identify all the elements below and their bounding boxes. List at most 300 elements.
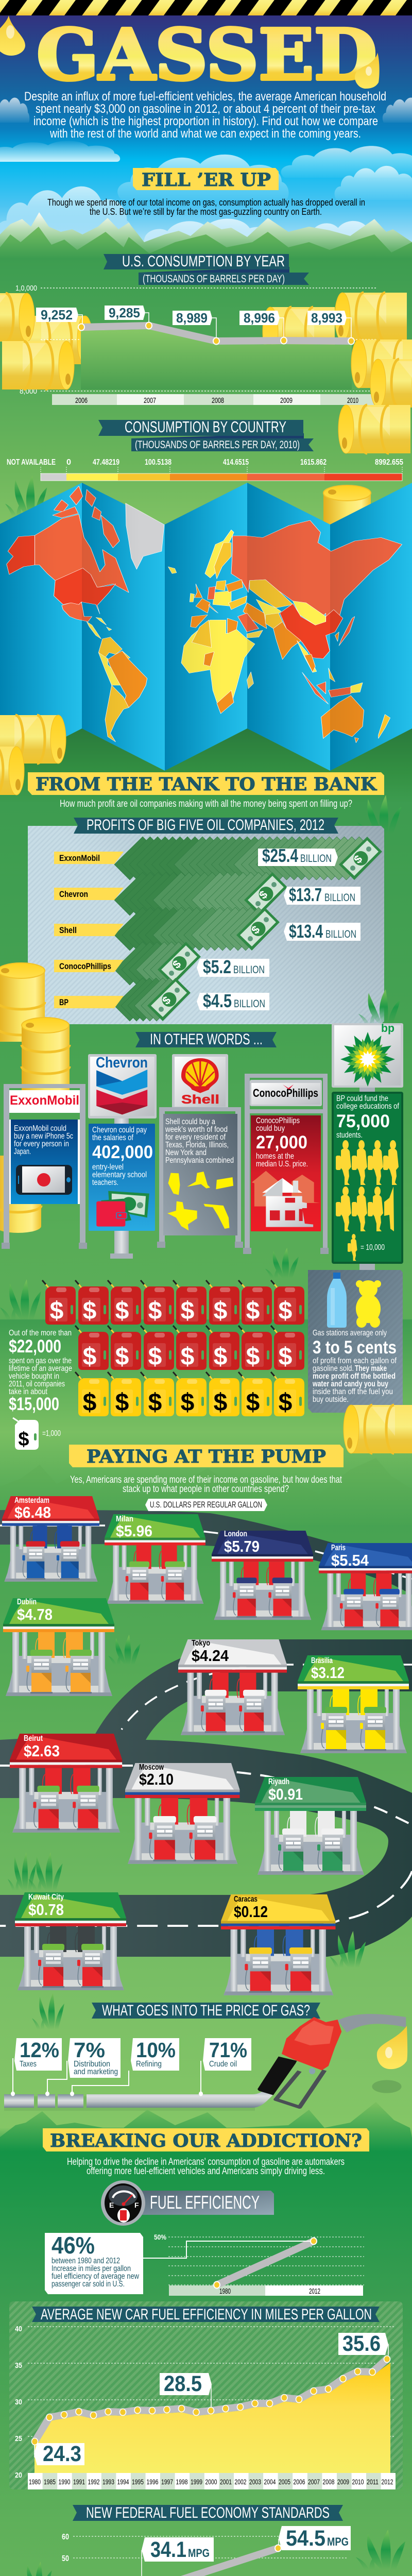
sign: Shell: Pennsylvania combined: [165, 1156, 234, 1165]
jerry cans: $22,000 pictogram: $: [83, 1343, 97, 1370]
sign: Shell: Texas, Florida, Illinois,: [165, 1141, 229, 1149]
company labels: Shell: [59, 925, 77, 935]
station: Amsterdam: $6.48: [14, 1503, 51, 1521]
text: $22,000 spent on gas: $15,000: [9, 1394, 59, 1414]
label: US dollars per regular gallon: [145, 1499, 267, 1511]
stack: ConocoPhillips: $: [170, 958, 183, 971]
icon: five US states: [167, 1172, 233, 1230]
breaking intro text: offering more fuel-efficient vehicles and Americans simply driving less.: [87, 2166, 325, 2177]
map legend: 0: [66, 458, 71, 467]
jerry cans: $22,000 pictogram: $: [83, 1297, 97, 1325]
sign: ConocoPhillips: median U.S. price.: [256, 1160, 308, 1168]
map legend: 8992.655: [375, 458, 403, 467]
icon: gas pump nozzle: [258, 2014, 406, 2107]
station: Riyadh: Riyadh: [268, 1777, 289, 1786]
heading: breaking our addiction: BREAKING OUR ADDICTION?: [50, 2130, 362, 2151]
box: distribution and marketing: and marketing: [74, 2067, 118, 2076]
line chart: U.S. consumption by year: 2006: [75, 396, 88, 405]
jerry cans: $22,000 pictogram: $: [279, 1343, 293, 1370]
year axis: 2012: [381, 2478, 393, 2486]
banner: U.S. consumption by year: (THOUSANDS OF BARRELS PER DAY): [143, 273, 285, 285]
station: Dublin: [3, 1598, 114, 1696]
grass: [28, 1852, 63, 1891]
year axis: 2004: [264, 2478, 276, 2486]
stack: ConocoPhillips: [114, 942, 201, 985]
profit value labels: $5.2: [203, 956, 231, 977]
panel: average new car fuel efficiency: 25: [15, 2434, 22, 2443]
jerry cans: $22,000 pictogram: $: [115, 1343, 129, 1370]
company labels: [54, 852, 124, 1008]
icon: fuel gauge: F: [134, 2201, 139, 2209]
station: Tokyo: $4.24: [192, 1647, 229, 1665]
callout: 46%: 46%: [52, 2232, 95, 2259]
mountains behind pump section: [0, 1458, 412, 1525]
jerry cans: $22,000 pictogram: $: [148, 1343, 162, 1370]
grass: [8, 1852, 36, 1891]
panel: gas station profits: of profit from each gallon of: [313, 1357, 397, 1365]
station: Tokyo: Tokyo: [192, 1639, 210, 1648]
station: Caracas: [221, 1894, 335, 1995]
fill er up text: the U.S. But we’re still by far the most gas-guzzling country on Earth.: [90, 207, 322, 217]
station: Kuwait City: Kuwait City: [28, 1893, 64, 1902]
countries: [7, 486, 402, 743]
text: $22,000 spent on gas: 2011, oil companies: [9, 1380, 65, 1388]
legend: one can equals 1,000: [13, 1418, 61, 1450]
station: Moscow: $2.10: [139, 1770, 174, 1788]
sign: BP: 75,000: [336, 1111, 390, 1131]
profit value labels: $25.4: [262, 845, 298, 866]
jerry cans: $22,000 pictogram: $: [246, 1297, 260, 1325]
row 1 red: [42, 1280, 304, 1325]
station: Brasilia: [298, 1655, 409, 1753]
year axis: [28, 2473, 396, 2489]
panel: gas station profits: Gas stations average only: [313, 1329, 387, 1337]
jerry cans: $22,000 pictogram: $: [83, 1389, 97, 1416]
station: Kuwait City: $0.78: [28, 1901, 64, 1919]
banner: U.S. consumption by year: U.S. CONSUMPTION BY YEAR: [122, 253, 285, 270]
road: [0, 1510, 412, 1957]
icon: gummy bear: [356, 1280, 381, 1328]
map legend: [7, 458, 403, 481]
pump intro text: [70, 1475, 342, 1495]
jerry cans: $22,000 pictogram: $: [214, 1389, 228, 1416]
panel: average new car fuel efficiency: 24.3: [43, 2442, 81, 2466]
station: London: [212, 1530, 313, 1620]
panel: average new car fuel efficiency: 35: [15, 2361, 22, 2370]
sign: ConocoPhillips: ConocoPhillips: [256, 1116, 300, 1125]
station: Moscow: [125, 1763, 239, 1864]
barrels behind chart: [0, 293, 407, 364]
station: Paris: Paris: [331, 1544, 346, 1552]
banner: consumption by country: [98, 418, 314, 451]
station: Milan: Milan: [116, 1515, 133, 1523]
sign: Chevron: teachers.: [92, 1178, 118, 1187]
year axis: 1997: [161, 2478, 173, 2486]
grass: [20, 2562, 52, 2576]
company labels: BP: [59, 997, 68, 1007]
line chart: U.S. consumption by year: 2009: [280, 396, 293, 405]
line chart: fuel economy standards: 54.5: [286, 2526, 325, 2551]
grass: [108, 1635, 141, 1665]
sign: ExxonMobil: [2, 1084, 87, 1249]
sign: BP: bp: [381, 1022, 394, 1035]
heading: fuel efficiency with gauge: [101, 2180, 274, 2226]
pump intro text: stack up to what people in other countries spend?: [123, 1484, 289, 1495]
station: London: $5.79: [224, 1537, 260, 1555]
sign: Shell: week’s worth of food: [165, 1125, 228, 1134]
text: $22,000 spent on gas: $22,000: [9, 1336, 61, 1357]
jerry cans: $22,000 pictogram: $: [115, 1297, 129, 1325]
sign: Chevron: entry-level: [92, 1163, 124, 1172]
station: Caracas: Caracas: [234, 1895, 258, 1904]
year axis: 2009: [337, 2478, 349, 2486]
title GASSED: GASSED: [37, 14, 377, 96]
icon: house: [252, 1171, 320, 1227]
text: $22,000 spent on gas: [9, 1329, 72, 1414]
sign: ExxonMobil: buy a new iPhone 5c: [14, 1132, 73, 1141]
icon: iPhone with Japanese flag: [16, 1165, 72, 1195]
year axis: 1999: [191, 2478, 202, 2486]
line chart: 46% increase in mpg: 2012: [309, 2287, 320, 2296]
panel: gas station profits: water and candy you buy: [312, 1380, 388, 1388]
station: Paris: [319, 1543, 412, 1630]
mountains behind breaking section: [0, 2102, 412, 2154]
standing barrel behind map: [323, 485, 371, 529]
icon: Shell logo: [181, 1058, 219, 1093]
stack: Chevron: $: [256, 888, 270, 902]
line chart: fuel economy standards: [62, 2526, 351, 2576]
line chart: 46% increase in mpg: [143, 2233, 364, 2296]
heading: from the tank to the bank: FROM THE TANK TO THE BANK: [36, 774, 377, 795]
box: distribution and marketing: Distribution: [74, 2060, 110, 2069]
jerry cans: $22,000 pictogram: $: [115, 1389, 129, 1416]
text: $22,000 spent on gas: take in about: [9, 1387, 48, 1396]
station: Beirut: $2.63: [24, 1742, 60, 1760]
year axis: 1998: [176, 2478, 188, 2486]
icon: oil drop from nozzle: [377, 2026, 407, 2069]
jerry cans: $22,000 pictogram: $: [148, 1389, 162, 1416]
line chart: fuel economy standards: MPG: [327, 2535, 349, 2548]
grass: [356, 2530, 405, 2569]
stack: Shell: [114, 907, 280, 951]
box: crude oil: [203, 2038, 251, 2071]
box: taxes: [14, 2038, 62, 2071]
company labels: Chevron: [59, 889, 88, 899]
banner: U.S. consumption by year: [104, 253, 309, 285]
year axis: 2002: [235, 2478, 247, 2486]
callout: 46%: passenger car sold in U.S.: [52, 2280, 125, 2289]
sign: Shell: for every resident of: [165, 1133, 226, 1142]
sign: ConocoPhillips: homes at the: [256, 1152, 294, 1161]
sign: Chevron: elementary school: [92, 1171, 147, 1179]
callout: 46%: between 1980 and 2012: [52, 2257, 120, 2265]
row 2 red: [75, 1326, 304, 1370]
profit value labels: $4.5: [203, 990, 232, 1011]
box: refining: [131, 2038, 179, 2071]
station: Milan: [105, 1514, 205, 1604]
line chart: fuel economy standards: MPG: [188, 2547, 210, 2560]
sign: ExxonMobil: ExxonMobil: [10, 1093, 79, 1108]
panel: average new car fuel efficiency: 28.5: [164, 2371, 202, 2396]
year axis: 2000: [205, 2478, 217, 2486]
panel: gas station profits: inside than off the fuel you: [313, 1387, 393, 1396]
year axis: 2006: [294, 2478, 305, 2486]
icon: fuel gauge: E: [109, 2201, 114, 2209]
heading: paying at the pump: PAYING AT THE PUMP: [87, 1446, 326, 1467]
panel: average new car fuel efficiency: [9, 2301, 403, 2489]
stack: Chevron: [114, 872, 287, 916]
station: Tokyo: [178, 1639, 287, 1735]
profit value labels: [197, 845, 360, 1011]
folded world map: [0, 483, 412, 771]
sign: Chevron: 402,000: [92, 1142, 153, 1162]
box: distribution and marketing: 7%: [74, 2038, 105, 2062]
sign: BP: college educations of: [336, 1102, 400, 1111]
student pictogram: [336, 1140, 399, 1261]
jerry cans: $22,000 pictogram: $: [279, 1389, 293, 1416]
sign: Chevron: Chevron: [96, 1055, 148, 1071]
sign: Chevron: Chevron could pay: [92, 1126, 147, 1134]
station: Beirut: Beirut: [24, 1734, 43, 1743]
line chart: U.S. consumption by year: 9,285: [109, 305, 140, 320]
panel: average new car fuel efficiency: 35.6: [342, 2331, 381, 2356]
heading: Fill 'er up: FILL ’ER UP: [142, 170, 271, 191]
sign: Shell: Shell could buy a: [165, 1117, 215, 1126]
box: distribution and marketing: [68, 2038, 121, 2078]
panel: average new car fuel efficiency: 40: [15, 2325, 22, 2333]
sign: BP: = 10,000: [360, 1243, 385, 1252]
year axis: 1994: [117, 2478, 129, 2486]
grass: [32, 1993, 64, 2029]
sign: BP: [332, 1022, 403, 1270]
sign: BP: BP could fund the: [336, 1094, 388, 1103]
map legend: 47.48219: [93, 458, 119, 467]
station: Kuwait City: [15, 1892, 126, 1990]
profit value labels: $13.7: [289, 884, 322, 905]
icon: water bottle: [327, 1273, 347, 1328]
line chart: U.S. consumption by year: 8,989: [176, 310, 208, 326]
text: $22,000 spent on gas: lifetime of an average: [9, 1364, 72, 1373]
profit value labels: BILLION: [324, 892, 355, 904]
jerry cans: $22,000 pictogram: $: [214, 1297, 228, 1325]
callout: 46%: fuel efficiency of average new: [52, 2272, 140, 2281]
callout: 46%: [45, 2232, 143, 2294]
banner: in other words: IN OTHER WORDS ...: [150, 1031, 263, 1048]
icon: oil drop right: [355, 53, 380, 89]
mountains: [0, 212, 412, 260]
panel: gas station profits: [308, 1270, 403, 1413]
breaking intro text: [67, 2157, 345, 2177]
line chart: fuel economy standards: 34.1: [150, 2537, 186, 2562]
station: Dublin: Dublin: [17, 1598, 37, 1606]
year axis: 2008: [322, 2478, 335, 2486]
station: Milan: $5.96: [116, 1522, 152, 1540]
company labels: ExxonMobil: [59, 853, 100, 863]
jerry cans: $22,000 pictogram: $: [50, 1297, 64, 1325]
line chart: fuel economy standards: 50: [62, 2554, 69, 2563]
line chart: 46% increase in mpg: 1980: [219, 2287, 231, 2296]
box: taxes: 12%: [20, 2038, 59, 2062]
stack: ExxonMobil: [114, 837, 382, 880]
jerry cans: $22,000 pictogram: $: [246, 1389, 260, 1416]
heading: fuel efficiency with gauge: FUEL EFFICIENCY: [150, 2192, 260, 2213]
callout: 46%: Increase in miles per gallon: [52, 2264, 131, 2273]
station: Paris: $5.54: [331, 1551, 369, 1569]
year axis: 2007: [308, 2478, 320, 2486]
line chart: U.S. consumption by year: [15, 284, 376, 405]
jerry cans: $22,000 pictogram: $: [279, 1297, 293, 1325]
stack: BP: $: [160, 994, 173, 1007]
hazard stripe header: [0, 0, 412, 15]
year axis: 1992: [88, 2478, 100, 2486]
profit value labels: BILLION: [234, 998, 265, 1010]
sign: ExxonMobil: for every person in: [14, 1140, 69, 1148]
intro text: [24, 90, 386, 141]
sign: Chevron: [88, 1054, 157, 1259]
icon: wallet with money: [96, 1191, 149, 1227]
banner: what goes into the price of gas: WHAT GOES INTO THE PRICE OF GAS?: [102, 2002, 310, 2019]
grass: [358, 989, 400, 1025]
year axis: 1980: [29, 2478, 41, 2486]
map legend: 100.5138: [145, 458, 171, 467]
year axis: 2005: [279, 2478, 290, 2486]
jerry cans: $22,000 pictogram: $: [181, 1389, 195, 1416]
sign: ConocoPhillips: 27,000: [256, 1132, 307, 1153]
year axis: 1993: [102, 2478, 114, 2486]
stack: ExxonMobil: $: [351, 853, 365, 866]
sign: Shell: [157, 1054, 243, 1248]
year axis: 2003: [249, 2478, 261, 2486]
panel: gas station profits: gasoline sold.: [313, 1364, 354, 1373]
sign: Shell: Shell: [181, 1093, 219, 1107]
barrel at right of pump heading: [344, 1405, 412, 1453]
station: Beirut: [10, 1734, 122, 1833]
box: crude oil: 71%: [209, 2038, 247, 2062]
station: Amsterdam: Amsterdam: [14, 1496, 49, 1505]
line chart: U.S. consumption by year: 1,0,000: [15, 284, 37, 293]
banner: consumption by country: CONSUMPTION BY COUNTRY: [125, 418, 286, 436]
barrels right of chart: [2, 340, 412, 453]
sign: ExxonMobil: Japan.: [14, 1147, 31, 1156]
year axis: 1996: [146, 2478, 159, 2486]
line chart: U.S. consumption by year: 9,252: [41, 307, 73, 323]
line chart: U.S. consumption by year: 8,993: [311, 310, 342, 326]
sign: BP: students.: [336, 1131, 363, 1140]
panel: gas station profits: 3 to 5 cents: [313, 1337, 397, 1358]
jerry cans: $22,000 pictogram: [42, 1280, 304, 1416]
map legend: NOT AVAILABLE: [7, 458, 56, 467]
company labels: ConocoPhillips: [59, 961, 111, 971]
box: refining: 10%: [136, 2038, 176, 2062]
panel: profits of big five oil companies: [28, 817, 384, 1024]
line chart: U.S. consumption by year: 8,000: [20, 387, 37, 396]
icon: oil drop left: [0, 15, 25, 56]
fill er up text: [47, 197, 365, 217]
pipe chart: price of gas breakdown: [4, 2038, 273, 2111]
panel: gas station profits: more profit off the bottled: [313, 1372, 396, 1381]
jerry cans: $22,000 pictogram: $: [181, 1343, 195, 1370]
sign: Shell: New York and: [165, 1148, 207, 1157]
row 3 yellow: [75, 1372, 304, 1416]
station: Moscow: Moscow: [139, 1763, 164, 1772]
grass: [330, 1931, 366, 1968]
jerry cans: $22,000 pictogram: $: [214, 1343, 228, 1370]
line chart: fuel economy standards: 60: [62, 2533, 69, 2541]
sign: ConocoPhillips: ConocoPhillips: [253, 1087, 318, 1099]
fold shading: [0, 483, 412, 771]
profit value labels: BILLION: [300, 853, 332, 865]
line chart: U.S. consumption by year: 2007: [144, 396, 156, 405]
station: London: London: [224, 1530, 247, 1538]
sign: ConocoPhillips: could buy: [256, 1124, 285, 1133]
map legend: 1615.862: [300, 458, 327, 467]
barrels under map: [0, 715, 66, 795]
jerry cans: $22,000 pictogram: $: [148, 1297, 162, 1325]
profit value labels: $13.4: [289, 921, 323, 942]
station: Dublin: $4.78: [17, 1605, 53, 1623]
line chart: U.S. consumption by year: 2008: [212, 396, 224, 405]
grass: [0, 1279, 41, 1320]
station: Amsterdam: [2, 1496, 99, 1582]
station: Brasilia: Brasilia: [311, 1656, 333, 1665]
year axis: 1985: [44, 2478, 56, 2486]
sign: ExxonMobil: ExxonMobil could: [14, 1124, 66, 1133]
grass: [357, 795, 401, 835]
line chart: U.S. consumption by year: 2010: [347, 396, 358, 405]
panel: gas station profits: buy outside.: [313, 1395, 349, 1404]
map legend: 414.6515: [223, 458, 249, 467]
profit value labels: BILLION: [233, 964, 265, 976]
profit value labels: BILLION: [325, 928, 356, 940]
year axis: 1991: [73, 2478, 85, 2486]
panel: average new car fuel efficiency: 20: [15, 2471, 22, 2480]
jerry cans: $22,000 pictogram: $: [246, 1343, 260, 1370]
box: taxes: Taxes: [20, 2060, 37, 2069]
legend: one can equals 1,000: $: [18, 1429, 29, 1450]
icon: fuel gauge: [101, 2180, 145, 2226]
grass near map: [5, 476, 47, 516]
text: $22,000 spent on gas: vehicle bought in: [9, 1372, 59, 1381]
grass: [265, 1248, 299, 1278]
clouds: [0, 98, 412, 255]
station: Caracas: $0.12: [234, 1903, 268, 1921]
box: crude oil: Crude oil: [209, 2060, 237, 2069]
station: Riyadh: [255, 1777, 366, 1875]
line chart: U.S. consumption by year: 8,996: [244, 310, 275, 326]
banner: consumption by country: (THOUSANDS OF BARRELS PER DAY, 2010): [135, 439, 300, 451]
icon: Chevron logo: [96, 1070, 147, 1114]
icon: BP helios logo: [340, 1032, 395, 1087]
line chart: 46% increase in mpg: 50%: [154, 2233, 166, 2241]
sign: Chevron: the salaries of: [92, 1133, 134, 1142]
text: $22,000 spent on gas: Out of the more than: [9, 1329, 72, 1337]
year axis: 2011: [367, 2478, 379, 2486]
legend: one can equals 1,000: =1,000: [42, 1429, 61, 1438]
stack: Shell: $: [249, 923, 262, 937]
box: refining: Refining: [136, 2060, 162, 2069]
label: US dollars per regular gallon: U.S. DOLLARS PER REGULAR GALLON: [150, 1500, 262, 1510]
year axis: 2010: [352, 2478, 364, 2486]
station: Brasilia: $3.12: [311, 1664, 345, 1682]
stack: BP: [114, 978, 191, 1021]
panel: profits of big five oil companies: PROFITS OF BIG FIVE OIL COMPANIES, 2012: [87, 817, 324, 834]
year axis: 1990: [59, 2478, 71, 2486]
station: Riyadh: $0.91: [268, 1785, 303, 1803]
panel: average new car fuel efficiency: 30: [15, 2398, 22, 2406]
panel: gas station profits: They make: [355, 1364, 387, 1373]
sign: ConocoPhillips: [243, 1074, 329, 1254]
standing barrel stacks left: [0, 963, 70, 1233]
